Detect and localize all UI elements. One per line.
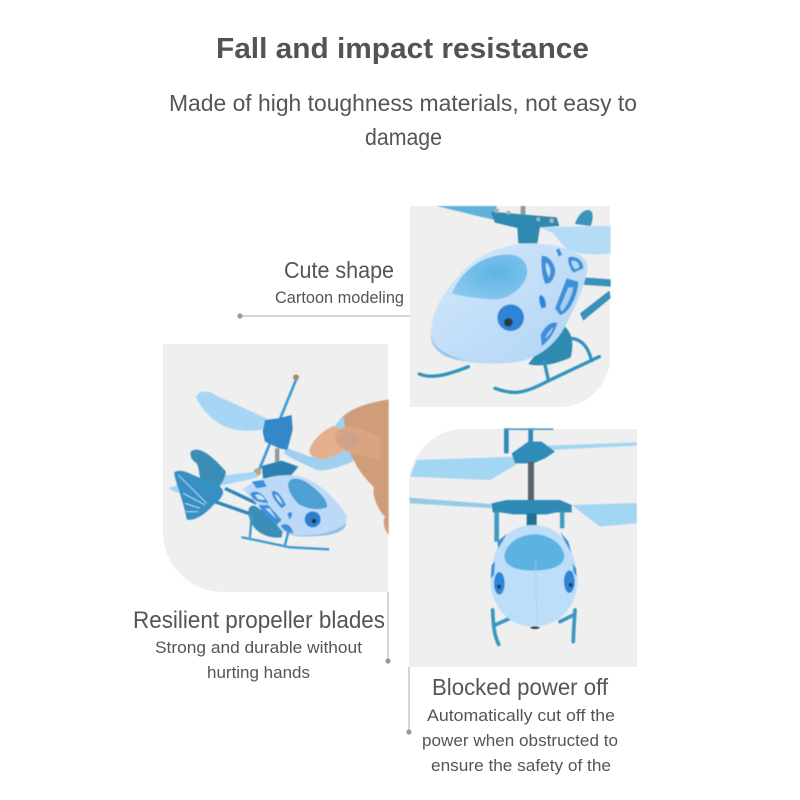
callout: resilient propeller blades: Strong and durable without xyxy=(155,639,362,657)
icon: landing skids xyxy=(419,338,599,392)
icon: upper hub and mast xyxy=(504,428,555,501)
icon: body spots xyxy=(250,480,321,533)
icon: rear top blade xyxy=(437,206,497,220)
subtitle text block: Made of high toughness materials, not easy to xyxy=(169,90,637,116)
callout: resilient propeller blades xyxy=(133,592,391,682)
icon: body spots xyxy=(491,532,577,595)
callout: cute shape: Cartoon modeling xyxy=(275,289,404,307)
callout: cute shape: Cute shape xyxy=(284,257,394,283)
callout: blocked power off xyxy=(406,667,618,775)
icon: palm of hand xyxy=(335,399,389,535)
icon: tail boom xyxy=(215,488,257,515)
icon: landing legs xyxy=(493,610,575,644)
callout: resilient propeller blades: Resilient propeller blades xyxy=(133,607,385,634)
icon: flybar xyxy=(258,378,297,472)
icon: rotor mast and hub xyxy=(491,206,559,243)
icon: landing skid xyxy=(242,515,328,549)
icon: right blade xyxy=(539,226,611,254)
icon: upper blades xyxy=(410,442,637,480)
callout: blocked power off: Automatically cut off the xyxy=(427,707,615,725)
icon: rotor base under body xyxy=(528,325,572,365)
icon: lower hub xyxy=(492,500,572,514)
callout: resilient propeller blades: hurting hands xyxy=(207,664,310,682)
icon: lower hub xyxy=(262,461,298,482)
icon: tail fin xyxy=(174,450,226,520)
icon: upper rotor blade left xyxy=(196,391,267,431)
icon: lower blades xyxy=(409,498,637,527)
icon: thumb xyxy=(334,427,380,460)
icon: helicopter body xyxy=(431,243,587,364)
icon: tail boom struts xyxy=(580,277,611,321)
subtitle text block: damage xyxy=(365,124,442,150)
icon: helicopter body xyxy=(243,475,347,536)
subtitle text block xyxy=(169,90,637,150)
icon: upper hub xyxy=(263,415,293,450)
icon: struts xyxy=(494,512,564,542)
icon: cockpit window xyxy=(452,254,527,299)
icon: lower blade left xyxy=(168,472,258,493)
panel: helicopter front view xyxy=(409,428,637,667)
panel: helicopter held by hand xyxy=(163,344,389,592)
icon: tail fin xyxy=(575,210,593,226)
icon: upper rotor blade right xyxy=(284,415,353,470)
callout: blocked power off: ensure the safety of the xyxy=(431,757,611,775)
icon: body spots xyxy=(497,248,583,346)
callout: blocked power off: Blocked power off xyxy=(432,674,609,700)
icon: helicopter body xyxy=(491,525,577,627)
icon: index finger xyxy=(309,426,347,459)
panel: close-up of helicopter side view xyxy=(410,206,611,407)
icon: cockpit window xyxy=(288,479,327,509)
title: Fall and impact resistance xyxy=(216,33,589,65)
callout: cute shape xyxy=(237,257,410,319)
icon: rotor base xyxy=(248,506,283,538)
icon: cockpit window xyxy=(504,534,564,571)
callout: blocked power off: power when obstructed to xyxy=(422,732,618,750)
